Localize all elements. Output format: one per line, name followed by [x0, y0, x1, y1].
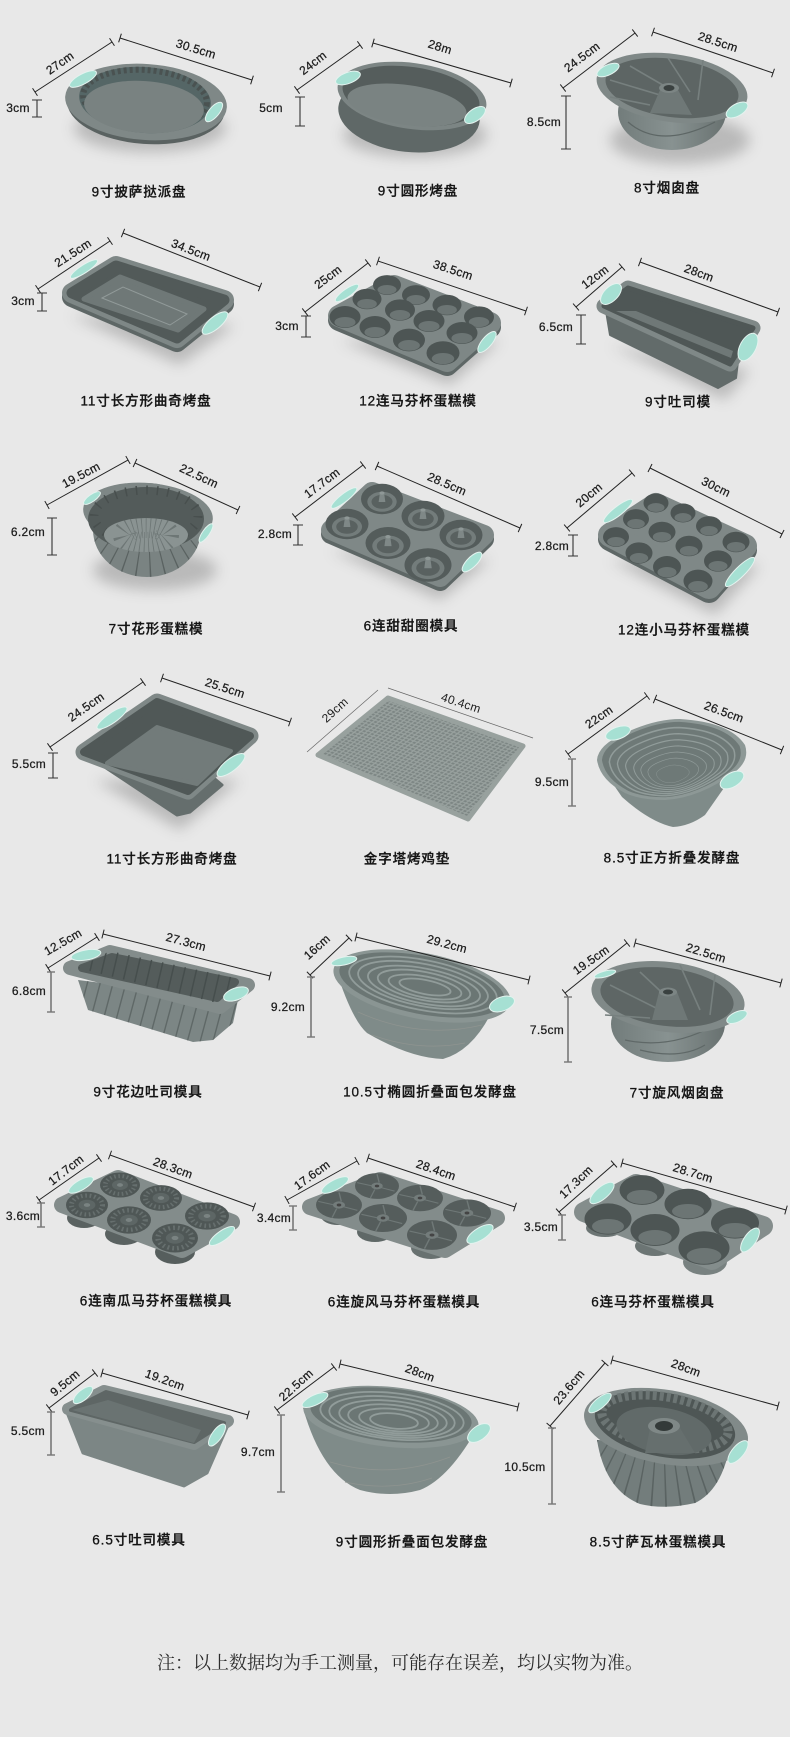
- pan: tart: [63, 58, 229, 152]
- length dimension: [135, 461, 238, 510]
- caption: 10.5寸椭圆折叠面包发酵盘: [343, 1084, 517, 1100]
- length dimension: 22.5cm: [177, 461, 221, 491]
- length dimension: 28.3cm: [151, 1154, 195, 1182]
- length dimension: 28.4cm: [414, 1157, 458, 1183]
- pan: fluted loaf: [70, 947, 250, 1042]
- length dimension: [340, 1361, 518, 1407]
- height dimension: 3.5cm: [524, 1220, 558, 1234]
- caption: 8.5寸萨瓦林蛋糕模具: [590, 1534, 726, 1550]
- caption: 6.5寸吐司模具: [92, 1532, 186, 1548]
- width dimension: 16cm: [301, 932, 333, 962]
- pan: 6 swirl muffin: [310, 1173, 497, 1259]
- length dimension: 19.2cm: [143, 1366, 187, 1394]
- caption: 9寸圆形烤盘: [378, 182, 458, 198]
- item: 11寸长方形曲奇烤盘 (row 2): [11, 233, 260, 408]
- width dimension: 9.5cm: [47, 1367, 83, 1399]
- length dimension: [655, 698, 782, 750]
- pan: rectangular cookie: [68, 257, 235, 365]
- length dimension: 28.5cm: [696, 29, 740, 55]
- caption: 9寸花边吐司模具: [93, 1084, 203, 1100]
- height dimension: [539, 315, 581, 344]
- length dimension: [622, 1160, 786, 1210]
- width dimension: [556, 1163, 614, 1212]
- height dimension: 6.8cm: [12, 984, 46, 998]
- width dimension: [305, 262, 368, 312]
- item: 6连旋风马芬杯蛋糕模具: [257, 1157, 515, 1310]
- height dimension: [258, 525, 298, 545]
- length dimension: 29.2cm: [425, 932, 469, 956]
- width dimension: [561, 33, 635, 88]
- width dimension: 23.6cm: [550, 1367, 588, 1407]
- length dimension: [162, 675, 290, 722]
- pan: bundt: [592, 44, 752, 164]
- width dimension: [567, 473, 632, 528]
- item: 11寸长方形曲奇烤盘 (row 4): [12, 675, 290, 866]
- mat: pyramid grid: [318, 698, 523, 819]
- height dimension: [11, 518, 52, 555]
- length dimension: 28.7cm: [671, 1160, 715, 1186]
- width dimension: [35, 42, 112, 92]
- height dimension: [11, 1412, 51, 1455]
- height dimension: 9.5cm: [535, 775, 569, 789]
- height dimension: 6.2cm: [11, 525, 45, 539]
- height dimension: [530, 997, 568, 1062]
- height dimension: 5.5cm: [12, 757, 46, 771]
- length dimension: [368, 1157, 515, 1207]
- caption: 6连马芬杯蛋糕模具: [591, 1294, 715, 1310]
- pan: flower: [81, 477, 217, 590]
- height dimension: [257, 1206, 293, 1230]
- width dimension: [42, 926, 97, 968]
- height dimension: 3cm: [11, 294, 35, 308]
- length dimension: 34.5cm: [169, 236, 213, 264]
- caption: 8寸烟囱盘: [634, 180, 700, 196]
- width dimension: 17.3cm: [556, 1163, 596, 1201]
- length dimension: 28.5cm: [425, 470, 469, 498]
- caption: 7寸花形蛋糕模: [109, 620, 203, 636]
- height dimension: [524, 1215, 562, 1240]
- pan: 6 pumpkin muffin: [62, 1172, 237, 1264]
- width dimension: [297, 45, 360, 90]
- length dimension: [378, 257, 526, 311]
- length dimension: 27.3cm: [164, 930, 208, 954]
- item: 6连马芬杯蛋糕模具: [524, 1160, 786, 1310]
- height dimension: [12, 972, 51, 1012]
- pan: loaf: [597, 280, 762, 400]
- item: 12连马芬杯蛋糕模: [275, 257, 526, 408]
- width dimension: [38, 236, 110, 289]
- length dimension: [103, 930, 270, 976]
- length dimension: [653, 29, 773, 73]
- width dimension: 29cm: [319, 695, 351, 725]
- width dimension: 22cm: [582, 703, 616, 731]
- length dimension: [102, 1366, 248, 1415]
- item: 8寸烟囱盘: [527, 29, 773, 196]
- length dimension: [373, 37, 511, 83]
- length dimension: 25.5cm: [203, 675, 247, 701]
- width dimension: 19.5cm: [60, 459, 102, 491]
- caption: 6连旋风马芬杯蛋糕模具: [328, 1294, 480, 1310]
- caption: 11寸长方形曲奇烤盘: [80, 392, 212, 408]
- height dimension: 2.8cm: [258, 527, 292, 541]
- width dimension: 24.5cm: [561, 39, 603, 75]
- pan: savarin: [584, 1388, 748, 1507]
- pan: 12 mini muffin: [601, 494, 760, 615]
- item: 9寸披萨挞派盘: [6, 36, 252, 200]
- caption: 9寸圆形折叠面包发酵盘: [336, 1534, 488, 1550]
- item: 10.5寸椭圆折叠面包发酵盘: [271, 932, 529, 1100]
- height dimension: [504, 1428, 552, 1504]
- length dimension: 30cm: [699, 474, 733, 500]
- height dimension: 10.5cm: [504, 1460, 546, 1474]
- caption: 6连南瓜马芬杯蛋糕模具: [80, 1292, 232, 1308]
- height dimension: 6.5cm: [539, 320, 573, 334]
- item: 9寸圆形折叠面包发酵盘: [241, 1361, 518, 1550]
- length dimension: [635, 940, 781, 983]
- height dimension: [271, 977, 311, 1037]
- item: 金字塔烤鸡垫: [307, 688, 533, 866]
- length dimension: [123, 233, 260, 287]
- caption: 9寸吐司模: [645, 394, 711, 410]
- width dimension: 12cm: [579, 262, 611, 292]
- height dimension: [241, 1415, 281, 1492]
- caption: 12连小马芬杯蛋糕模: [618, 622, 750, 638]
- width dimension: 19.5cm: [570, 942, 612, 978]
- height dimension: 8.5cm: [527, 115, 561, 129]
- length dimension: 40.4cm: [439, 690, 483, 716]
- width dimension: [39, 1152, 99, 1200]
- length dimension: 38.5cm: [431, 257, 475, 283]
- width dimension: [565, 942, 627, 993]
- item: 9寸花边吐司模具: [12, 926, 270, 1100]
- height dimension: [259, 97, 300, 126]
- pan: 6-donut: [326, 484, 490, 600]
- width dimension: [568, 696, 647, 754]
- width dimension: [301, 932, 349, 975]
- caption: 9寸披萨挞派盘: [92, 184, 186, 200]
- caption: 8.5寸正方折叠发酵盘: [604, 850, 740, 866]
- length dimension: [377, 466, 520, 528]
- height dimension: [535, 535, 573, 556]
- length dimension: 28cm: [669, 1356, 703, 1380]
- width dimension: 27cm: [43, 49, 77, 77]
- footnote: 注：以上数据均为手工测量，可能存在误差，均以实物为准。: [157, 1653, 643, 1673]
- height dimension: [11, 293, 42, 311]
- bowl: square folding: [597, 719, 747, 827]
- height dimension: 3cm: [6, 101, 30, 115]
- length dimension: [612, 1356, 778, 1406]
- width dimension: 17.6cm: [291, 1157, 333, 1193]
- item: 9寸吐司模: [539, 261, 778, 410]
- item: 8.5寸萨瓦林蛋糕模具: [504, 1356, 778, 1550]
- width dimension: [47, 459, 128, 505]
- item: 8.5寸正方折叠发酵盘: [535, 696, 782, 866]
- caption: 11寸长方形曲奇烤盘: [106, 850, 238, 866]
- height dimension: 5.5cm: [11, 1424, 45, 1438]
- width dimension: [576, 262, 622, 307]
- height dimension: [275, 316, 306, 337]
- length dimension: 28m: [426, 37, 454, 57]
- length dimension: 26.5cm: [702, 698, 746, 726]
- height dimension: 9.7cm: [241, 1445, 275, 1459]
- length dimension: [640, 261, 778, 312]
- width dimension: [50, 682, 143, 747]
- item: 9寸圆形烤盘: [259, 37, 511, 198]
- height dimension: 9.2cm: [271, 1000, 305, 1014]
- item: 6连甜甜圈模具: [258, 465, 520, 634]
- pan: swirl bundt: [587, 953, 749, 1062]
- width dimension: [287, 1157, 357, 1200]
- caption: 6连甜甜圈模具: [364, 618, 458, 634]
- item: 7寸花形蛋糕模: [11, 459, 238, 636]
- width dimension: [276, 1366, 334, 1410]
- height dimension: [527, 96, 566, 149]
- bowl: round folding: [300, 1378, 494, 1494]
- height dimension: [6, 1203, 41, 1227]
- width dimension: 24cm: [297, 48, 329, 78]
- length dimension: [110, 1154, 254, 1207]
- length dimension: [120, 36, 252, 80]
- height dimension: 2.8cm: [535, 539, 569, 553]
- length dimension: 22.5cm: [684, 940, 728, 966]
- bowl: oval folding: [327, 936, 517, 1059]
- width dimension: 17.7cm: [45, 1152, 87, 1188]
- height dimension: 5cm: [259, 101, 283, 115]
- width dimension: 17.7cm: [301, 465, 343, 501]
- width dimension: [47, 1367, 95, 1408]
- height dimension: 3.6cm: [6, 1209, 40, 1223]
- item: 6.5寸吐司模具: [11, 1366, 248, 1548]
- length dimension: 28cm: [682, 261, 716, 285]
- width dimension: 21.5cm: [52, 236, 94, 270]
- height dimension: 3.4cm: [257, 1211, 291, 1225]
- height dimension: [535, 759, 572, 806]
- width dimension: 12.5cm: [42, 926, 84, 958]
- item: 12连小马芬杯蛋糕模: [535, 468, 782, 638]
- width dimension: [550, 1363, 605, 1426]
- caption: 金字塔烤鸡垫: [364, 850, 450, 866]
- length dimension: [388, 688, 533, 738]
- length dimension: [356, 932, 529, 980]
- item: 7寸旋风烟囱盘: [530, 940, 781, 1100]
- width dimension: 20cm: [573, 480, 605, 510]
- height dimension: 3cm: [275, 319, 299, 333]
- length dimension: 30.5cm: [174, 36, 218, 62]
- pan: round: [333, 53, 491, 159]
- length dimension: 28cm: [403, 1361, 437, 1385]
- pan: square: [82, 702, 250, 830]
- length dimension: [650, 468, 782, 534]
- height dimension: [6, 100, 37, 117]
- pan: small loaf: [66, 1383, 229, 1486]
- height dimension: [12, 753, 53, 778]
- item: 6连南瓜马芬杯蛋糕模具: [6, 1152, 254, 1308]
- pan: 6 muffin: [584, 1175, 763, 1275]
- width dimension: [295, 465, 363, 517]
- caption: 7寸旋风烟囱盘: [630, 1084, 724, 1100]
- caption: 12连马芬杯蛋糕模: [359, 392, 477, 408]
- width dimension: 25cm: [312, 262, 344, 292]
- width dimension: 22.5cm: [276, 1366, 316, 1404]
- height dimension: 7.5cm: [530, 1023, 564, 1037]
- pan: 12-cup muffin: [330, 275, 500, 385]
- width dimension: 24.5cm: [65, 689, 107, 725]
- width dimension: [307, 690, 378, 752]
